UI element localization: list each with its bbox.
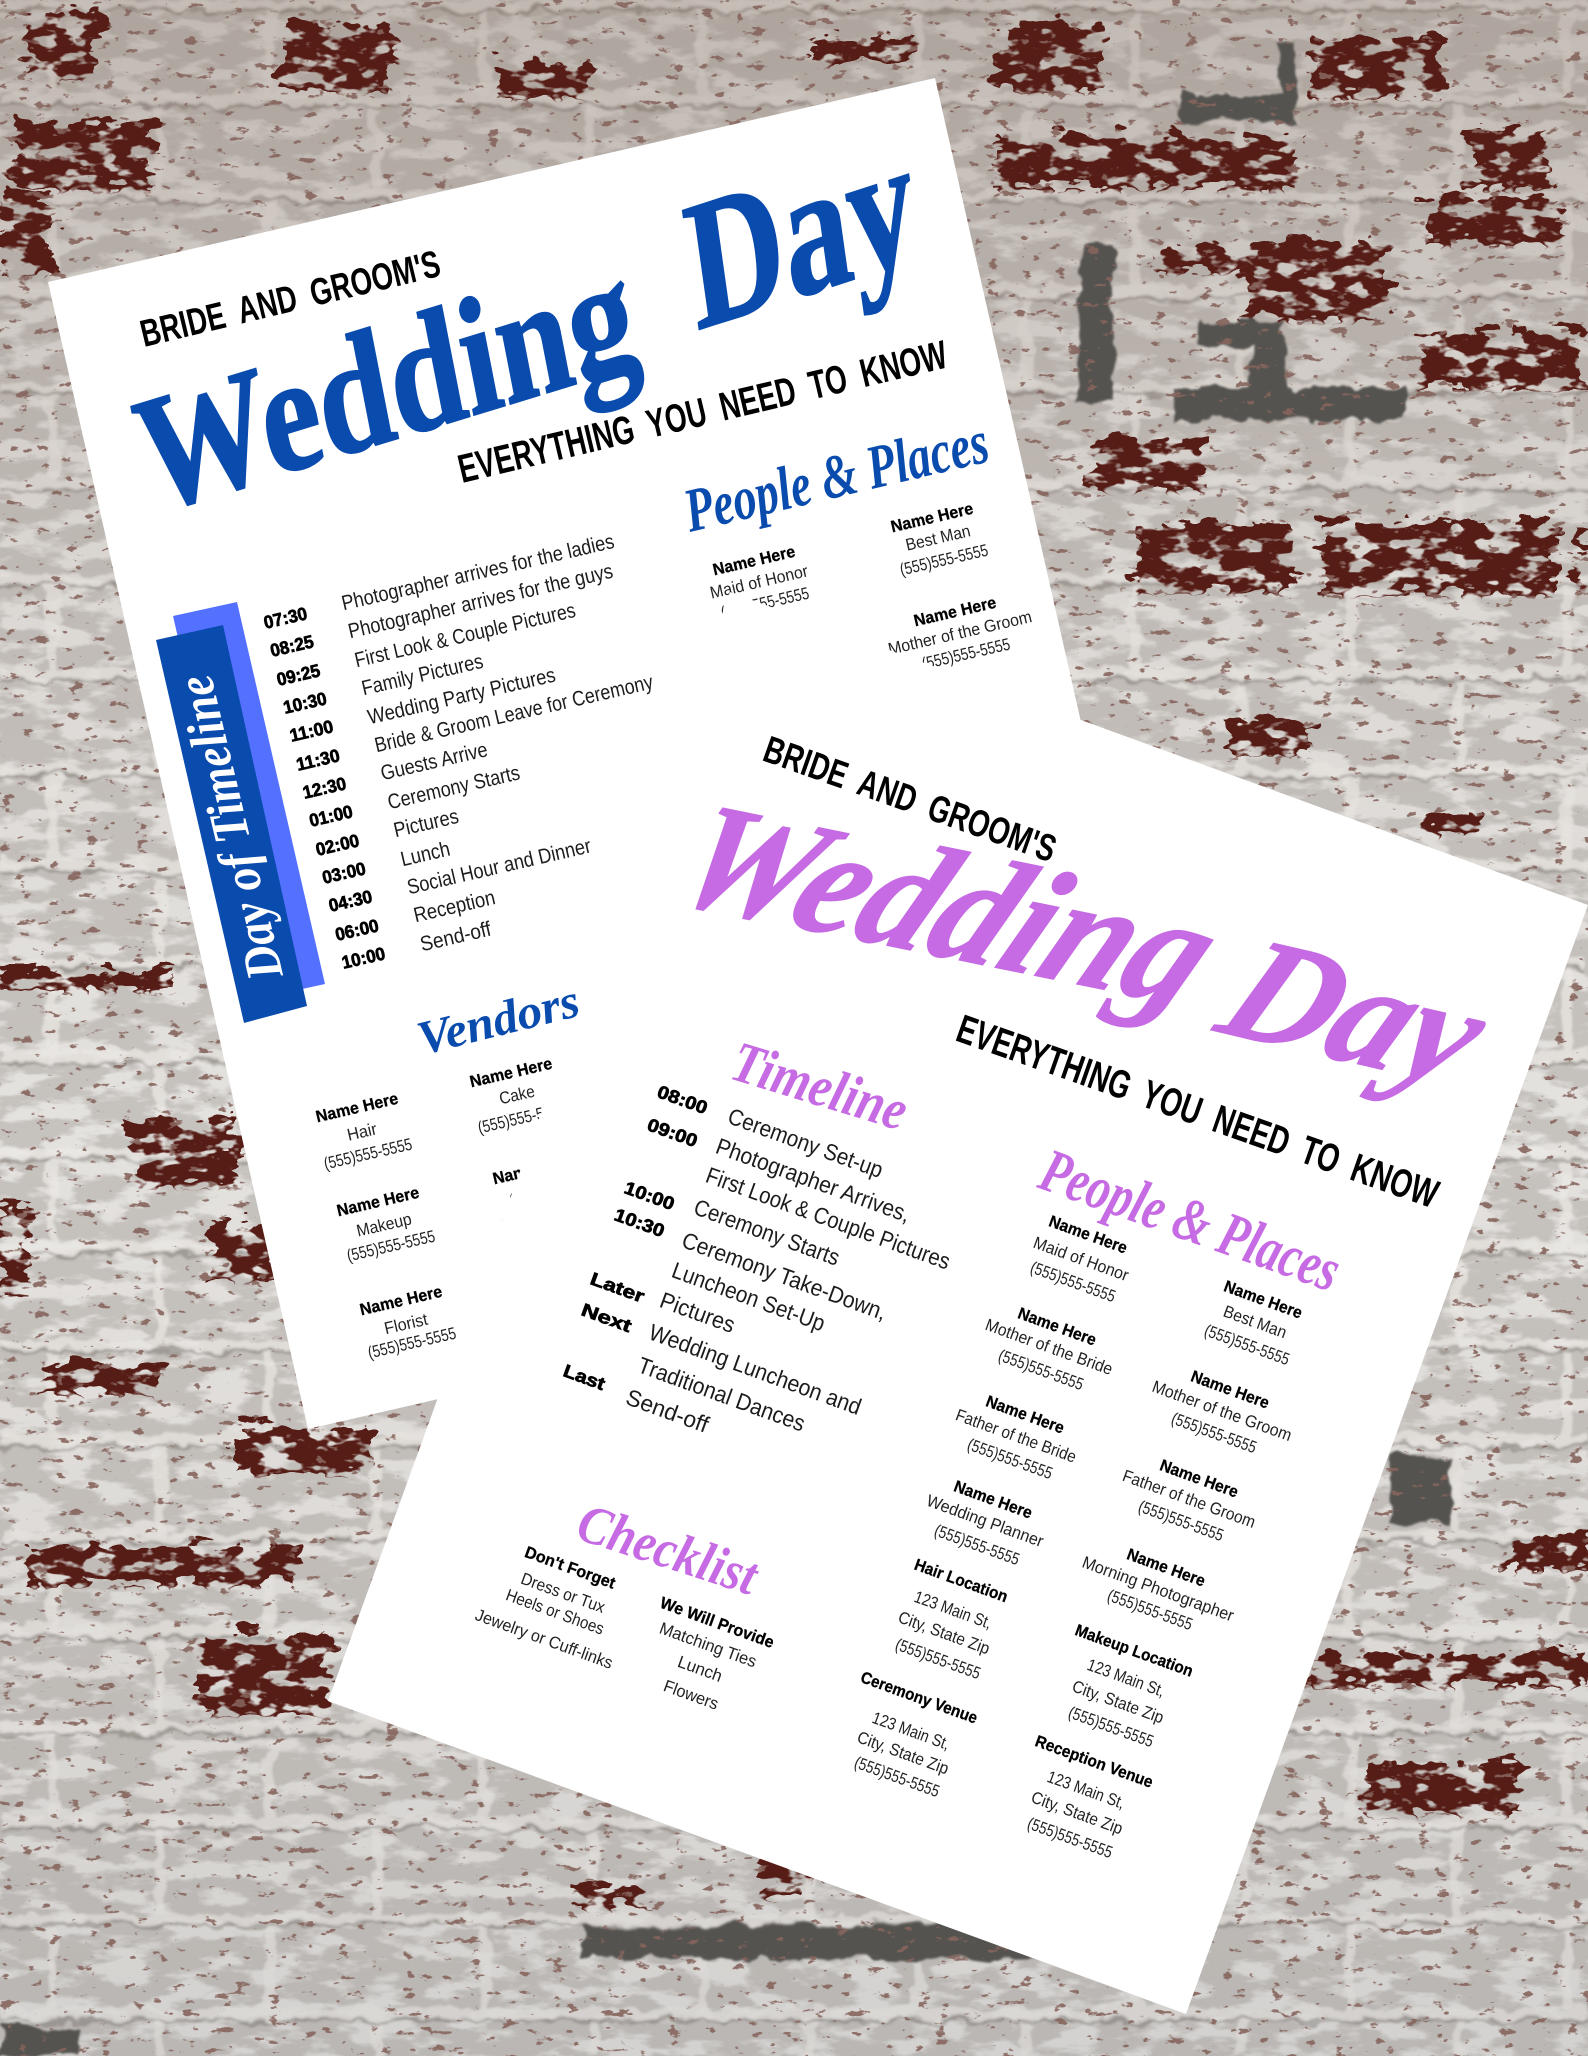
timeline: events: Family Pictures	[359, 650, 485, 700]
contact: best man: (555)555-5555	[898, 541, 990, 579]
contact: maid of honor: Name Here	[711, 543, 797, 579]
timeline: times: 11:30	[294, 745, 342, 775]
contact: father of the groom: Name Here	[1157, 1457, 1241, 1501]
contacts: people and places	[708, 500, 1034, 673]
timeline: events: Luncheon Set-Up	[669, 1257, 829, 1336]
checklist: don't forget: Heels or Shoes	[503, 1585, 607, 1639]
vendor: partly hidden: Name Here	[491, 1152, 577, 1188]
vendor: florist: Florist	[382, 1310, 430, 1338]
vendor: makeup: (555)555-5555	[345, 1227, 437, 1265]
timeline: events: Lunch	[398, 838, 452, 871]
contact: maid of honor: Name Here	[1046, 1213, 1130, 1257]
vendor: partly hidden	[491, 1152, 591, 1235]
timeline: times: 10:30	[281, 688, 329, 718]
contact: best man: Name Here	[889, 500, 975, 536]
contact: wedding planner: (555)555-5555	[932, 1521, 1022, 1569]
contact: best man	[889, 500, 990, 579]
timeline: events: Reception	[411, 886, 497, 927]
timeline: times: 10:00	[622, 1178, 677, 1214]
checklist: don't forget: Jewelry or Cuff-links	[473, 1605, 615, 1673]
location: hair	[893, 1556, 1010, 1683]
timeline: events: Ceremony Starts	[385, 761, 522, 814]
timeline: events: Social Hour and Dinner	[405, 835, 593, 899]
vendor: hair: Hair	[345, 1119, 379, 1145]
timeline: times	[262, 603, 387, 973]
checklist: we will provide	[657, 1594, 776, 1714]
location: ceremony venue: City, State Zip	[855, 1728, 951, 1778]
contact: mother of the groom	[886, 594, 1034, 673]
banner: light blue backing	[173, 602, 325, 998]
vendor: makeup	[335, 1184, 437, 1265]
contact: father of the bride: (555)555-5555	[965, 1435, 1055, 1483]
timeline: events: First Look & Couple Pictures	[703, 1162, 954, 1274]
contact: mother of the groom: Mother of the Groom	[886, 607, 1034, 659]
location: hair: Hair Location	[912, 1556, 1010, 1606]
checklist: we will provide: Matching Ties	[657, 1619, 759, 1671]
title: Wedding Day: Wedding	[649, 773, 1248, 1038]
contact: father of the bride: Name Here	[983, 1393, 1067, 1437]
title: Wedding Day: Wedding	[122, 219, 650, 550]
contact: mother of the bride: Mother of the Bride	[983, 1315, 1115, 1379]
contact: morning photographer: Name Here	[1124, 1546, 1208, 1590]
vendor: hair: (555)555-5555	[322, 1135, 414, 1173]
contact: mother of the groom: Name Here	[1188, 1368, 1272, 1412]
location: reception venue: Reception Venue	[1033, 1732, 1155, 1792]
timeline: events: Wedding Luncheon and	[646, 1319, 865, 1420]
contact: best man: (555)555-5555	[1202, 1321, 1292, 1369]
vendor: florist	[358, 1283, 458, 1362]
timeline: times: 03:00	[320, 858, 368, 888]
contact: maid of honor: (555)555-5555	[1028, 1258, 1118, 1306]
contacts: left column	[852, 1213, 1132, 1801]
vendor: partly hidden: Catering	[508, 1177, 570, 1209]
contact: best man	[1202, 1278, 1305, 1369]
timeline: times: 09:25	[275, 660, 322, 690]
location: reception venue	[1025, 1732, 1155, 1862]
location: ceremony venue: (555)555-5555	[852, 1753, 942, 1801]
vendor: makeup: Makeup	[355, 1209, 413, 1241]
contact: maid of honor: Maid of Honor	[1031, 1233, 1132, 1285]
contact: father of the groom: Father of the Groom	[1120, 1466, 1258, 1532]
location: makeup	[1066, 1621, 1195, 1751]
timeline: events	[623, 1103, 954, 1438]
contacts: vendors	[314, 1055, 591, 1362]
vendor: hair: Name Here	[314, 1090, 400, 1126]
location: reception venue: (555)555-5555	[1025, 1814, 1115, 1862]
heading: vendors: Vendors	[412, 974, 585, 1066]
contact: father of the groom: (555)555-5555	[1136, 1497, 1226, 1545]
contact: father of the bride	[953, 1393, 1079, 1483]
contact: maid of honor: (555)555-5555	[719, 584, 811, 622]
vendor: partly hidden: (555)555-5555	[499, 1197, 591, 1235]
timeline: times: 08:00	[655, 1082, 710, 1118]
checklist: don't forget: Don't Forget	[522, 1543, 618, 1593]
location: ceremony venue: Ceremony Venue	[858, 1669, 980, 1727]
checklist: we will provide: Flowers	[661, 1676, 721, 1714]
checklist: don't forget: Dress or Tux	[518, 1569, 608, 1617]
location: makeup: Makeup Location	[1073, 1621, 1195, 1681]
timeline: times: Later	[588, 1269, 647, 1307]
timeline: events: Send-off	[623, 1384, 713, 1438]
timeline: events: Send-off	[418, 918, 493, 956]
vendor: florist: Name Here	[358, 1283, 444, 1319]
timeline: events: Photographer Arrives,	[713, 1133, 914, 1227]
timeline: times: 11:00	[288, 716, 335, 746]
contact: maid of honor	[1028, 1213, 1132, 1306]
contact: mother of the groom: Mother of the Groom	[1150, 1377, 1294, 1445]
timeline: events: Guests Arrive	[378, 738, 490, 785]
timeline: events: First Look & Couple Pictures	[352, 599, 578, 672]
heading: bride and groom's: BRIDE AND GROOM'S	[136, 243, 445, 356]
heading: people and places: People & Places	[677, 408, 995, 546]
vendor: cake	[468, 1055, 568, 1137]
timeline: times: 10:30	[612, 1205, 667, 1241]
contact: father of the bride: Father of the Bride	[953, 1405, 1079, 1467]
subtitle: everything you need to know: EVERYTHING YOU NEED TO KNOW	[454, 333, 952, 492]
location: reception venue: City, State Zip	[1029, 1788, 1125, 1838]
heading: checklist: Checklist	[570, 1491, 767, 1607]
contact: mother of the bride: Name Here	[1015, 1305, 1099, 1349]
timeline: events: Ceremony Set-up	[725, 1103, 887, 1183]
timeline: times: Last	[561, 1361, 608, 1394]
location: makeup: 123 Main St,	[1085, 1655, 1167, 1701]
contacts: right column	[1025, 1278, 1305, 1862]
location: hair: 123 Main St,	[912, 1587, 994, 1633]
contact: best man: Name Here	[1221, 1278, 1305, 1322]
contact: mother of the groom: Name Here	[912, 594, 998, 630]
timeline: times: 12:30	[301, 773, 348, 803]
heading: bride and groom's: BRIDE AND GROOM'S	[758, 729, 1061, 871]
contact: mother of the bride: (555)555-5555	[996, 1346, 1086, 1394]
contact: mother of the groom: (555)555-5555	[920, 635, 1012, 673]
timeline: events: Pictures	[657, 1287, 739, 1338]
contact: mother of the groom: (555)555-5555	[1169, 1409, 1259, 1457]
heading: timeline: Timeline	[724, 1028, 915, 1143]
timeline: events: Photographer arrives for the ladies	[339, 530, 616, 615]
timeline: times: 09:00	[645, 1115, 700, 1151]
contact: maid of honor	[708, 543, 811, 622]
timeline: times: 08:25	[268, 631, 316, 661]
location: makeup: City, State Zip	[1070, 1677, 1166, 1727]
timeline: times: 04:30	[327, 886, 374, 916]
panel: purple wedding day sheet	[328, 592, 1588, 2014]
checklist: we will provide: We Will Provide	[658, 1594, 776, 1652]
vendor: cake: Cake	[497, 1082, 537, 1108]
timeline: times	[561, 1082, 710, 1394]
heading: people and places: People & Places	[1031, 1136, 1349, 1305]
location: hair: City, State Zip	[896, 1608, 992, 1658]
timeline: times: 07:30	[262, 603, 309, 633]
contact: wedding planner: Name Here	[951, 1478, 1035, 1522]
timeline: times: 06:00	[333, 915, 381, 945]
timeline: events: Wedding Party Pictures	[365, 664, 558, 729]
timeline: events: Photographer arrives for the guys	[346, 560, 615, 643]
title: Wedding Day: Day	[1195, 907, 1518, 1116]
location: makeup: (555)555-5555	[1066, 1703, 1156, 1751]
timeline: events: Traditional Dances	[635, 1352, 809, 1436]
banner: day of timeline: Day of Timeline	[167, 670, 295, 986]
timeline: times: Next	[579, 1300, 634, 1336]
location: reception venue: 123 Main St,	[1045, 1767, 1127, 1813]
vendor: cake: (555)555-5555	[476, 1099, 568, 1137]
title: Wedding Day: Day	[674, 96, 927, 370]
vendor: hair	[314, 1090, 414, 1173]
timeline: events: Pictures	[391, 805, 461, 842]
location: ceremony venue	[852, 1669, 980, 1801]
timeline: events: Bride & Groom Leave for Ceremony	[372, 671, 656, 757]
timeline: events	[339, 530, 656, 956]
contact: morning photographer: (555)555-5555	[1105, 1586, 1195, 1634]
location: ceremony venue: 123 Main St,	[870, 1708, 952, 1754]
timeline: events: Ceremony Take-Down,	[679, 1227, 890, 1325]
checklist: we will provide: Lunch	[675, 1652, 725, 1686]
title: Wedding Day	[649, 773, 1518, 1116]
title: Wedding Day	[122, 96, 927, 550]
contact: wedding planner	[924, 1478, 1046, 1569]
timeline: times: 10:00	[340, 943, 387, 973]
vendor: makeup: Name Here	[335, 1184, 421, 1220]
location: hair: (555)555-5555	[893, 1635, 983, 1683]
vendor: florist: (555)555-5555	[366, 1324, 458, 1362]
contact: wedding planner: Wedding Planner	[924, 1491, 1046, 1551]
timeline: events: Ceremony Starts	[691, 1194, 843, 1271]
timeline: times: 02:00	[314, 830, 361, 860]
contact: maid of honor: Maid of Honor	[708, 561, 810, 603]
contact: best man: Best Man	[904, 521, 972, 555]
timeline: times: 01:00	[307, 801, 355, 831]
contact: best man: Best Man	[1221, 1302, 1289, 1342]
vendor: cake: Name Here	[468, 1055, 554, 1091]
checklist: don't forget	[473, 1543, 618, 1673]
panel: blue wedding day sheet	[48, 78, 1195, 1429]
contact: morning photographer: Morning Photographer	[1080, 1553, 1237, 1625]
